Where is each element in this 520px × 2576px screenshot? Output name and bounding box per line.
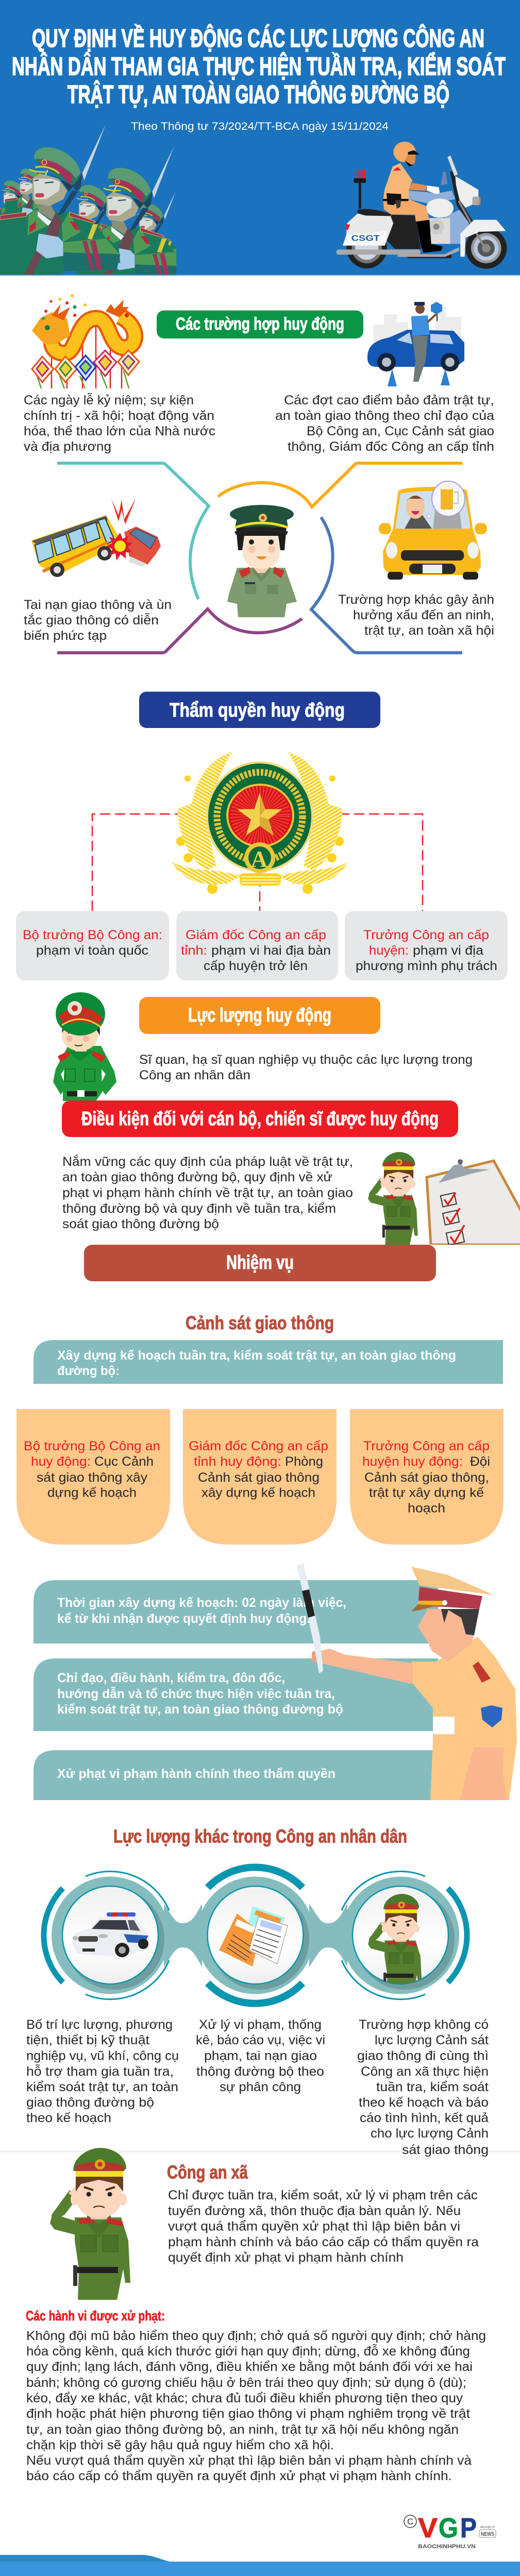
icon: police emblem bbox=[172, 752, 348, 894]
text: other forces 1: hỗ trợ tham gia tuần tra, bbox=[26, 2064, 174, 2079]
text: conditions: an toàn giao thông đường bộ, quy định về xử bbox=[62, 1170, 332, 1184]
panel: plan task: đường bộ: bbox=[57, 1364, 120, 1378]
heading: nhiệm vụ: Nhiệm vụ bbox=[226, 1252, 294, 1274]
text: other forces 1: theo kế hoạch bbox=[26, 2111, 111, 2125]
text: conditions: soát giao thông đường bộ bbox=[62, 1217, 219, 1231]
text: sanctioned behaviours: quy định; lạng lách, đánh võng, điều khiển xe bằng một bánh đối với xe hai bbox=[26, 2359, 473, 2374]
heading: các trường hợp huy động: Các trường hợp huy động bbox=[176, 314, 344, 334]
text: other forces 3: tuần tra, kiểm soát bbox=[376, 2080, 489, 2094]
panel: director plan: tỉnh huy động: bbox=[194, 1454, 281, 1469]
title bbox=[12, 24, 506, 109]
text: other forces 2: sự phân công bbox=[220, 2080, 301, 2094]
text: sanctioned behaviours: định hoặc phát hiện phương tiện giao thông vi phạm nghiêm trọng về trật bbox=[26, 2406, 470, 2421]
text: other forces 3: Công an xã thực hiện bbox=[361, 2064, 489, 2079]
panel: district head: huyện: bbox=[369, 943, 409, 958]
text: other forces 1 bbox=[26, 2018, 179, 2125]
text: other forces 2 bbox=[196, 2018, 325, 2094]
panel: provincial director: phạm vi hai địa bàn bbox=[211, 943, 331, 958]
connector: teal bbox=[57, 463, 209, 599]
text: case 4: hưởng xấu đến an ninh, bbox=[353, 608, 494, 622]
text: sanctioned behaviours bbox=[26, 2329, 486, 2483]
panel: district plan: Cảnh sát giao thông, bbox=[364, 1470, 489, 1485]
panel: time task: Thời gian xây dựng kế hoạch: 02 ngày làm việc, bbox=[57, 1596, 346, 1610]
text: other forces 3: cáo tình hình, kết quả bbox=[360, 2111, 489, 2125]
panel: director plan bbox=[183, 1409, 337, 1545]
text: case 1: hóa, thể thao lớn của Nhà nước bbox=[24, 424, 215, 438]
panel: provincial director: tỉnh: bbox=[181, 943, 207, 958]
text: case 1: chính trị - xã hội; hoạt động văn bbox=[24, 409, 214, 423]
heading: thẩm quyền huy động: Thẩm quyền huy động bbox=[170, 700, 345, 721]
text: conditions: Nắm vững các quy định của pháp luật về trật tự, bbox=[62, 1154, 353, 1169]
text: other forces 3: cho lực lượng Cảnh bbox=[371, 2126, 489, 2141]
panel: minister bbox=[16, 911, 169, 980]
panel: district plan bbox=[350, 1409, 504, 1545]
icon: bus crash bbox=[31, 498, 161, 577]
connector: purple bbox=[57, 609, 302, 653]
panel: minister plan: dựng kế hoạch bbox=[47, 1486, 137, 1500]
text: case 1: và địa phương bbox=[24, 439, 111, 454]
text: commune description: Chỉ được tuần tra, kiểm soát, xử lý vi phạm trên các bbox=[168, 2188, 478, 2202]
panel: district head: phương mình phụ trách bbox=[356, 959, 497, 973]
text: other forces 1: kiểm soát trật tự, an toàn bbox=[26, 2080, 178, 2094]
icon: traffic police with baton bbox=[297, 1563, 517, 1800]
text: case 2: an toàn giao thông theo chỉ đạo của bbox=[275, 409, 494, 423]
text: sanctioned behaviours: bánh; không có gương chiếu hậu ở bên trái theo quy định; sử dụng ô (dù); bbox=[26, 2376, 466, 2390]
heading: điều kiện bbox=[62, 1100, 458, 1137]
icon: officer with car and cones bbox=[367, 302, 464, 386]
text: other forces 3: giao thông đi cùng thì bbox=[357, 2048, 489, 2063]
panel: district head bbox=[345, 911, 508, 980]
panel: director plan: xây dựng kế hoạch bbox=[202, 1486, 315, 1500]
text: emblem monogram: A bbox=[251, 846, 267, 872]
icon: clipboard bbox=[427, 1159, 520, 1245]
panel: district plan: Đội bbox=[470, 1454, 490, 1469]
panel: direct task: hướng dẫn và tổ chức thực hiện việc tuần tra, bbox=[57, 1686, 335, 1701]
heading: các hành vi: Các hành vi được xử phạt: bbox=[26, 2308, 165, 2324]
text: case 3: biến phức tạp bbox=[24, 629, 107, 643]
panel: direct task: kiểm soát trật tự, an toàn giao thông đường bộ bbox=[57, 1702, 343, 1717]
heading: thẩm quyền huy động bbox=[139, 691, 380, 728]
subtitle: Theo Thông tư 73/2024/TT-BCA ngày 15/11/2024 bbox=[131, 121, 389, 132]
text: sanctioned behaviours: Nếu vượt quá thẩm quyền xử phạt thì lập biên bản vi phạm hành chính và bbox=[26, 2453, 472, 2468]
panel: district plan: huyện huy động: bbox=[362, 1454, 463, 1469]
panel: minister: Bộ trưởng Bộ Công an: bbox=[23, 928, 162, 942]
panel: plan task bbox=[33, 1340, 503, 1384]
text: forces description: Sĩ quan, hạ sĩ quan nghiệp vụ thuộc các lực lượng trong bbox=[139, 1053, 473, 1067]
illustration: traffic police on motorbike bbox=[337, 142, 507, 269]
text: forces description: Công an nhân dân bbox=[139, 1068, 250, 1082]
text: commune description: vượt quá thẩm quyền xử phạt thì lập biên bản vi bbox=[168, 2219, 460, 2234]
panel: minister plan bbox=[16, 1409, 170, 1545]
logo: VGP: C bbox=[407, 2517, 413, 2527]
logo: VGP bbox=[404, 2513, 496, 2550]
panel: sanction task: Xử phạt vi phạm hành chính theo thẩm quyền bbox=[57, 1767, 336, 1781]
panel: district plan: hoạch bbox=[408, 1501, 445, 1516]
text: other forces 2: phạm, tai nạn giao bbox=[204, 2048, 317, 2063]
heading: cảnh sát giao thông: Cảnh sát giao thông bbox=[186, 1312, 334, 1333]
panel: time task: kể từ khi nhận được quyết định huy động. bbox=[57, 1612, 310, 1626]
panel: time task bbox=[33, 1580, 438, 1643]
text: case 3 bbox=[24, 598, 172, 643]
text: other forces 3 bbox=[357, 2018, 489, 2157]
text: case 2: thông, Giám đốc Công an cấp tỉnh bbox=[288, 439, 494, 454]
text: other forces 2: Xử lý vi phạm, thống bbox=[199, 2018, 322, 2032]
text: other forces 1: giao thông đường bộ bbox=[26, 2095, 154, 2110]
text: other forces 1: Bố trí lực lượng, phương bbox=[26, 2018, 173, 2032]
connector: blue bbox=[311, 517, 462, 653]
diagram: three linked circles bbox=[44, 1867, 467, 2004]
text: sanctioned behaviours: tự, an toàn giao thông đường bộ, an ninh, trật tự xã hội nếu không ngăn bbox=[26, 2422, 459, 2437]
panel: director plan: Cảnh sát giao thông bbox=[198, 1470, 320, 1485]
text: sanctioned behaviours: Không đội mũ bảo hiểm theo quy định; chở quá số người quy định; chở hàng bbox=[26, 2329, 486, 2343]
dashed connectors bbox=[92, 814, 423, 911]
panel: district plan: trật tự xây dựng kế bbox=[369, 1486, 484, 1500]
panel: provincial director: cấp huyện trở lên bbox=[204, 959, 308, 973]
icon: saluting officer bbox=[368, 1152, 418, 1246]
text: bike label: CSGT bbox=[351, 234, 380, 243]
text: case 2: Các đợt cao điểm bảo đảm trật tự, bbox=[284, 393, 494, 408]
text: sanctioned behaviours: báo cáo cấp có thẩm quyền ra quyết định xử phạt vi phạm hành chính. bbox=[26, 2469, 452, 2483]
text: case 2: Bộ Công an, Cục Cảnh sát giao bbox=[307, 424, 494, 438]
panel: minister plan: Bộ trưởng Bộ Công an bbox=[24, 1439, 160, 1453]
icon: officer hands on hips bbox=[53, 992, 116, 1101]
text: sanctioned behaviours: hóa cồng kềnh, quá kích thước giới hạn quy định; dừng, đỗ xe không đúng bbox=[26, 2344, 470, 2359]
header panel bbox=[0, 0, 520, 293]
text: case 4: trật tự, an toàn xã hội bbox=[364, 623, 494, 638]
logo: VGP: BAOCHINHPHU.VN bbox=[418, 2544, 476, 2550]
text: case 1: Các ngày lễ kỷ niệm; sự kiện bbox=[24, 393, 194, 408]
text: other forces 2: thông đường bộ theo bbox=[196, 2064, 324, 2079]
text: other forces 3: Trường hợp không có bbox=[359, 2018, 489, 2032]
panel: plan task: Xây dựng kế hoạch tuần tra, kiểm soát trật tự, an toàn giao thông bbox=[57, 1348, 456, 1363]
panel: minister plan: huy động: bbox=[31, 1454, 91, 1469]
panel: provincial director bbox=[176, 911, 338, 980]
heading: lực lượng khác: Lực lượng khác trong Công an nhân dân bbox=[113, 1826, 407, 1846]
icon: dragon dance bbox=[32, 294, 139, 388]
icon: drunk driver in yellow car bbox=[379, 481, 487, 580]
text: sanctioned behaviours: chặn kịp thời sẽ gây hậu quả nguy hiểm cho xã hội. bbox=[26, 2438, 334, 2452]
heading: nhiệm vụ bbox=[84, 1245, 436, 1281]
text: other forces 3: lực lượng Cảnh sát bbox=[375, 2033, 489, 2047]
text: case 4 bbox=[338, 592, 494, 638]
text: conditions: phạt vi phạm hành chính về trật tự, an toàn giao bbox=[62, 1186, 353, 1200]
icon: commune officer bbox=[50, 2148, 130, 2300]
text: other forces 3: sát giao thông bbox=[402, 2143, 489, 2157]
panel: district plan: Trưởng Công an cấp bbox=[363, 1439, 490, 1453]
logo: VGP: BÁO ĐIỆN TỬ bbox=[480, 2525, 495, 2529]
icon: saluting officer in circle bbox=[368, 1894, 422, 1984]
text: other forces 3: theo kế hoạch và báo bbox=[359, 2095, 489, 2110]
panel: sanction task bbox=[33, 1750, 438, 1800]
panel: district head: phạm vi địa bbox=[413, 943, 483, 958]
text: commune description: tuyến đường xã, thôn thuộc địa bàn quản lý. Nếu bbox=[168, 2204, 461, 2218]
connector: orange bbox=[218, 463, 462, 507]
text: sanctioned behaviours: kéo, đẩy xe khác, vật khác; chưa đủ tuổi điều khiển phương tiện theo quy bbox=[26, 2391, 463, 2405]
text: case 2 bbox=[275, 393, 494, 454]
text: other forces 2: kê, báo cáo vụ, việc vi bbox=[196, 2033, 325, 2047]
heading: lực lượng huy động: Lực lượng huy động bbox=[188, 1005, 331, 1026]
panel: direct task bbox=[33, 1658, 438, 1731]
text: conditions bbox=[62, 1154, 353, 1231]
panel: provincial director: Giám đốc Công an cấp bbox=[186, 928, 326, 942]
panel: minister: phạm vi toàn quốc bbox=[36, 943, 148, 958]
logo: VGP: NEWS bbox=[481, 2531, 494, 2537]
icon: documents bbox=[219, 1906, 288, 1967]
text: case 4: Trường hợp khác gây ảnh bbox=[338, 592, 494, 607]
logo: VGP: P bbox=[460, 2513, 477, 2544]
text: commune description bbox=[168, 2188, 479, 2265]
heading: lực lượng huy động bbox=[139, 997, 380, 1034]
text: commune description: quyết định xử phạt vi phạm hành chính bbox=[168, 2250, 404, 2265]
text: forces description bbox=[139, 1053, 473, 1082]
panel: direct task: Chỉ đạo, điều hành, kiểm tra, đôn đốc, bbox=[57, 1671, 285, 1685]
panel: district head: Trưởng Công an cấp bbox=[363, 928, 489, 942]
text: other forces 1: nghiệp vụ, vũ khí, công cụ bbox=[26, 2048, 179, 2063]
text: other forces 1: tiện, thiết bị kỹ thuật bbox=[26, 2033, 149, 2047]
panel: minister plan: sát giao thông xây bbox=[37, 1470, 148, 1485]
panel: director plan: Giám đốc Công an cấp bbox=[189, 1439, 328, 1453]
text: conditions: thông đường bộ và quy định về tuần tra, kiểm bbox=[62, 1201, 336, 1216]
panel: minister plan: Cục Cảnh bbox=[94, 1454, 154, 1469]
illustration: marching soldiers bbox=[0, 125, 176, 275]
logo: VGP: V bbox=[418, 2513, 438, 2544]
text: case 3: tắc giao thông có diễn bbox=[24, 613, 159, 628]
text: case 1 bbox=[24, 393, 215, 454]
heading: công an xã: Công an xã bbox=[167, 2162, 248, 2182]
heading: các trường hợp huy động bbox=[157, 310, 363, 338]
logo: VGP: G bbox=[439, 2513, 458, 2544]
panel: director plan: Phòng bbox=[285, 1454, 323, 1469]
icon: police car bbox=[72, 1912, 150, 1959]
text: case 3: Tai nạn giao thông và ùn bbox=[24, 598, 172, 612]
footer bar bbox=[0, 2555, 520, 2576]
text: commune description: phạm hành chính và báo cáo cấp có thẩm quyền ra bbox=[168, 2235, 479, 2249]
icon: central police officer bbox=[227, 505, 297, 617]
